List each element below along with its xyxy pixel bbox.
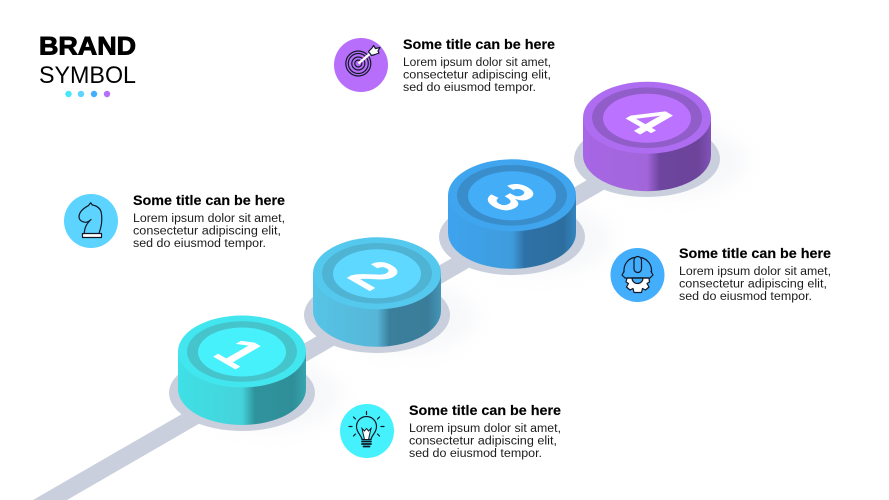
number 3: 3	[471, 174, 551, 220]
text block: top: consectetur adipiscing elit,	[403, 70, 551, 82]
text block: right: Lorem ipsum dolor sit amet,	[679, 266, 831, 278]
text block: left: consectetur adipiscing elit,	[133, 226, 281, 238]
road path	[33, 161, 640, 500]
text block: left: sed do eiusmod tempor.	[133, 238, 266, 250]
text block: bottom: sed do eiusmod tempor.	[409, 448, 542, 460]
text block: right: Some title can be here	[679, 245, 831, 261]
icon: helmet and gear	[610, 248, 664, 302]
text block: bottom	[409, 402, 561, 460]
icon: target	[334, 38, 388, 92]
text block: bottom: Some title can be here	[409, 402, 561, 418]
text block: right: consectetur adipiscing elit,	[679, 278, 827, 290]
step 1 disc	[169, 316, 342, 431]
text block: right	[679, 245, 831, 303]
text block: left: Some title can be here	[133, 192, 285, 208]
brand logo: BRAND	[39, 32, 136, 60]
text block: top: Some title can be here	[403, 36, 555, 52]
text block: top: sed do eiusmod tempor.	[403, 82, 536, 94]
text block: right: sed do eiusmod tempor.	[679, 291, 812, 303]
step 2 disc	[304, 237, 477, 353]
step 3 disc	[439, 159, 612, 275]
text block: left	[133, 192, 285, 250]
text block: bottom: consectetur adipiscing elit,	[409, 436, 557, 448]
number 1: 1	[200, 330, 280, 376]
icon: chess knight	[64, 194, 118, 248]
brand logo: SYMBOL	[39, 62, 136, 89]
brand logo	[39, 32, 136, 97]
text block: bottom: Lorem ipsum dolor sit amet,	[409, 423, 561, 435]
icon: light bulb	[340, 404, 394, 458]
text block: left: Lorem ipsum dolor sit amet,	[133, 213, 285, 225]
text block: top	[403, 36, 555, 94]
text block: top: Lorem ipsum dolor sit amet,	[403, 57, 551, 69]
step 4 disc	[574, 82, 747, 197]
number 4: 4	[608, 97, 688, 143]
number 2: 2	[335, 252, 415, 298]
